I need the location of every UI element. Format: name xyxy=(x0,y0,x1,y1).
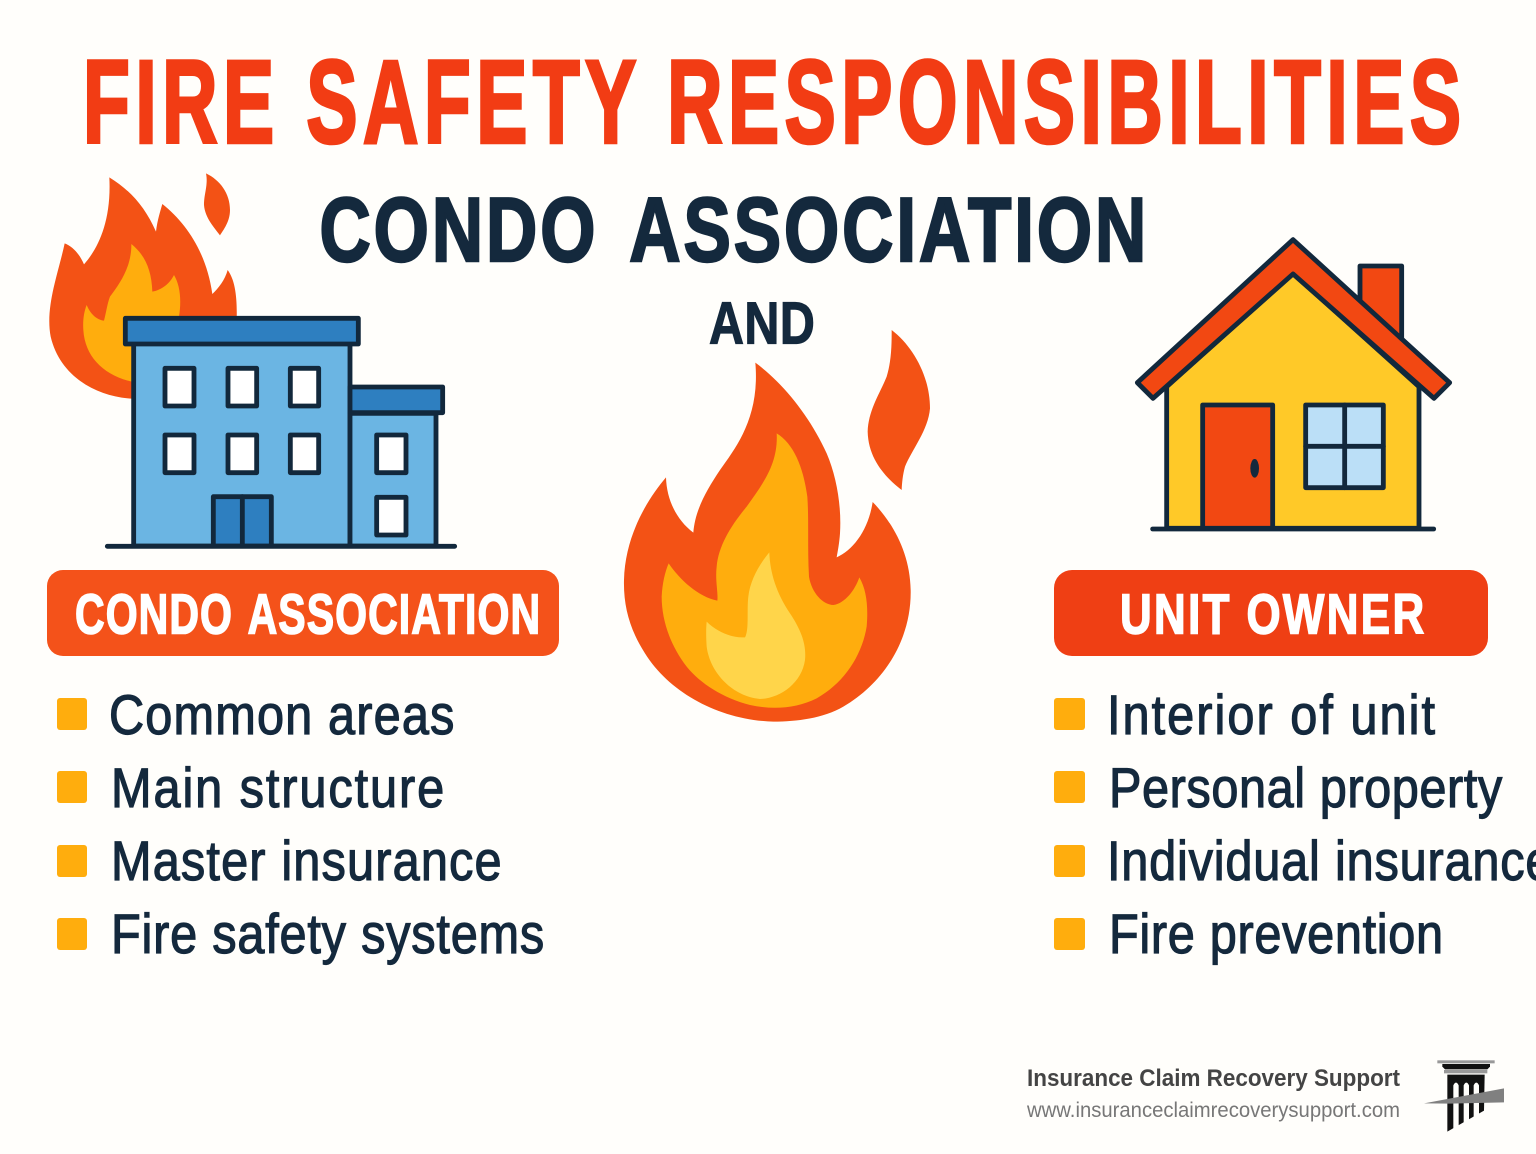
panel: condo association xyxy=(47,173,559,966)
footer: brand name: Insurance Claim Recovery Support xyxy=(1027,1065,1400,1092)
list: unit owner responsibilities xyxy=(1054,684,1536,966)
list: condo association responsibilities xyxy=(57,684,544,966)
list item: personal property: Personal property xyxy=(1109,757,1503,820)
icon: central flame xyxy=(624,330,930,722)
subtitle: and: AND xyxy=(709,291,815,357)
subtitle: condo association: CONDO ASSOCIATION xyxy=(320,179,1146,281)
label: unit owner xyxy=(1054,570,1488,656)
panel: unit owner xyxy=(1054,240,1536,966)
icon: burning condo building xyxy=(49,173,455,546)
icon: house xyxy=(1137,240,1450,529)
title: FIRE SAFETY RESPONSIBILITIES xyxy=(83,37,1461,168)
icon: column logo xyxy=(1424,1060,1504,1132)
list item: fire safety systems: Fire safety systems xyxy=(111,903,544,966)
list item: common areas: Common areas xyxy=(109,684,454,747)
footer: website: www.insuranceclaimrecoverysupport.com xyxy=(1026,1099,1400,1122)
list item: master insurance: Master insurance xyxy=(111,830,502,893)
list item: fire prevention: Fire prevention xyxy=(1109,903,1443,966)
label: unit owner: UNIT OWNER xyxy=(1120,582,1424,646)
list item: main structure: Main structure xyxy=(111,757,444,820)
label: condo association: CONDO ASSOCIATION xyxy=(75,582,540,646)
label: condo association xyxy=(47,570,559,656)
list item: interior of unit: Interior of unit xyxy=(1107,684,1435,747)
